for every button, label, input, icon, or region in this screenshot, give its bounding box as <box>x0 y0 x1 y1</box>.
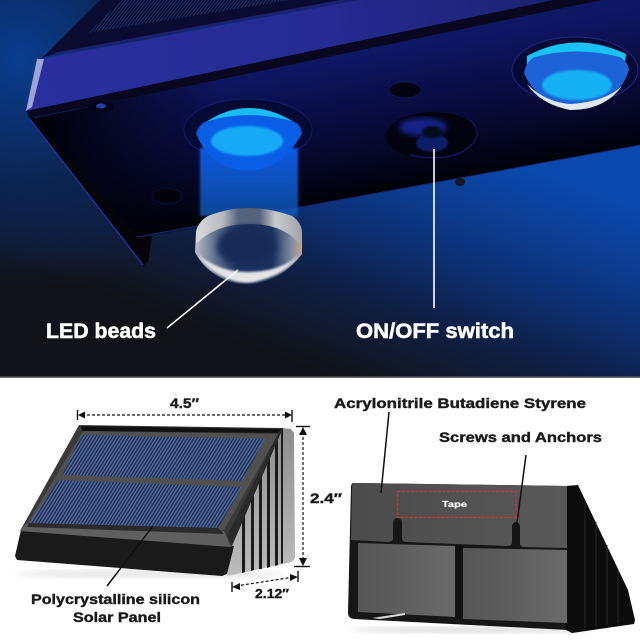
upper plate <box>351 483 567 548</box>
screw hole lower <box>152 188 182 204</box>
label: LED beads: LED beads <box>46 320 156 343</box>
label: Polycrystalline silicon Solar Panel: Solar Panel <box>73 609 161 625</box>
label: Acrylonitrile Butadiene Styrene: Acrylonitrile Butadiene Styrene <box>334 395 586 411</box>
label: Polycrystalline silicon Solar Panel <box>31 591 200 625</box>
dimension: height 2.4 inches <box>294 426 342 566</box>
tape area <box>398 492 516 518</box>
label: Polycrystalline silicon Solar Panel: Polycrystalline silicon <box>31 591 200 607</box>
lower compartment right <box>463 548 567 623</box>
side flange <box>28 116 640 266</box>
light beam <box>200 148 298 216</box>
label: ON/OFF switch: ON/OFF switch <box>356 320 514 343</box>
dimension: width 4.5 inches: 4.5″ <box>170 395 199 411</box>
screw hole near switch <box>389 82 421 98</box>
black housing <box>348 483 568 630</box>
white foot glint <box>372 613 405 619</box>
solar light front view <box>15 425 295 578</box>
front base <box>15 530 234 576</box>
dimension: depth 2.12 inches <box>232 571 298 601</box>
front band of device <box>26 0 640 118</box>
panel frame <box>20 425 283 547</box>
leader line: LED beads <box>167 270 238 328</box>
solar panel top of device <box>42 0 362 58</box>
icon: left LED bead <box>184 99 312 161</box>
small bump under edge <box>455 178 465 186</box>
label: Screws and Anchors: Screws and Anchors <box>439 429 602 445</box>
leader line: solar panel <box>107 526 153 586</box>
panel: LED and switch close-up <box>0 0 640 377</box>
solar light rear view <box>348 483 635 633</box>
side ribs <box>227 428 295 576</box>
solar cells <box>29 435 265 528</box>
icon: right LED bead <box>512 37 638 110</box>
center divider <box>456 545 462 618</box>
leader line: ABS material <box>381 412 389 493</box>
leader line: ON/OFF switch <box>433 149 435 308</box>
dimension: height 2.4 inches: 2.4″ <box>310 490 342 506</box>
panel: product dimensions <box>0 376 640 640</box>
shadow <box>15 570 285 578</box>
shadow <box>350 627 590 633</box>
lower compartment left <box>358 543 455 617</box>
tape area: Tape <box>442 499 467 509</box>
left LED lens <box>196 115 302 170</box>
glass lens <box>195 208 302 284</box>
side ribs <box>566 485 635 633</box>
icon: ON/OFF switch <box>386 112 480 160</box>
device underside <box>35 0 640 237</box>
leader line: screws and anchors <box>517 455 526 523</box>
screw hole top left <box>88 102 114 112</box>
dimension: width 4.5 inches <box>78 395 292 422</box>
dimension: depth 2.12 inches: 2.12″ <box>255 586 289 601</box>
